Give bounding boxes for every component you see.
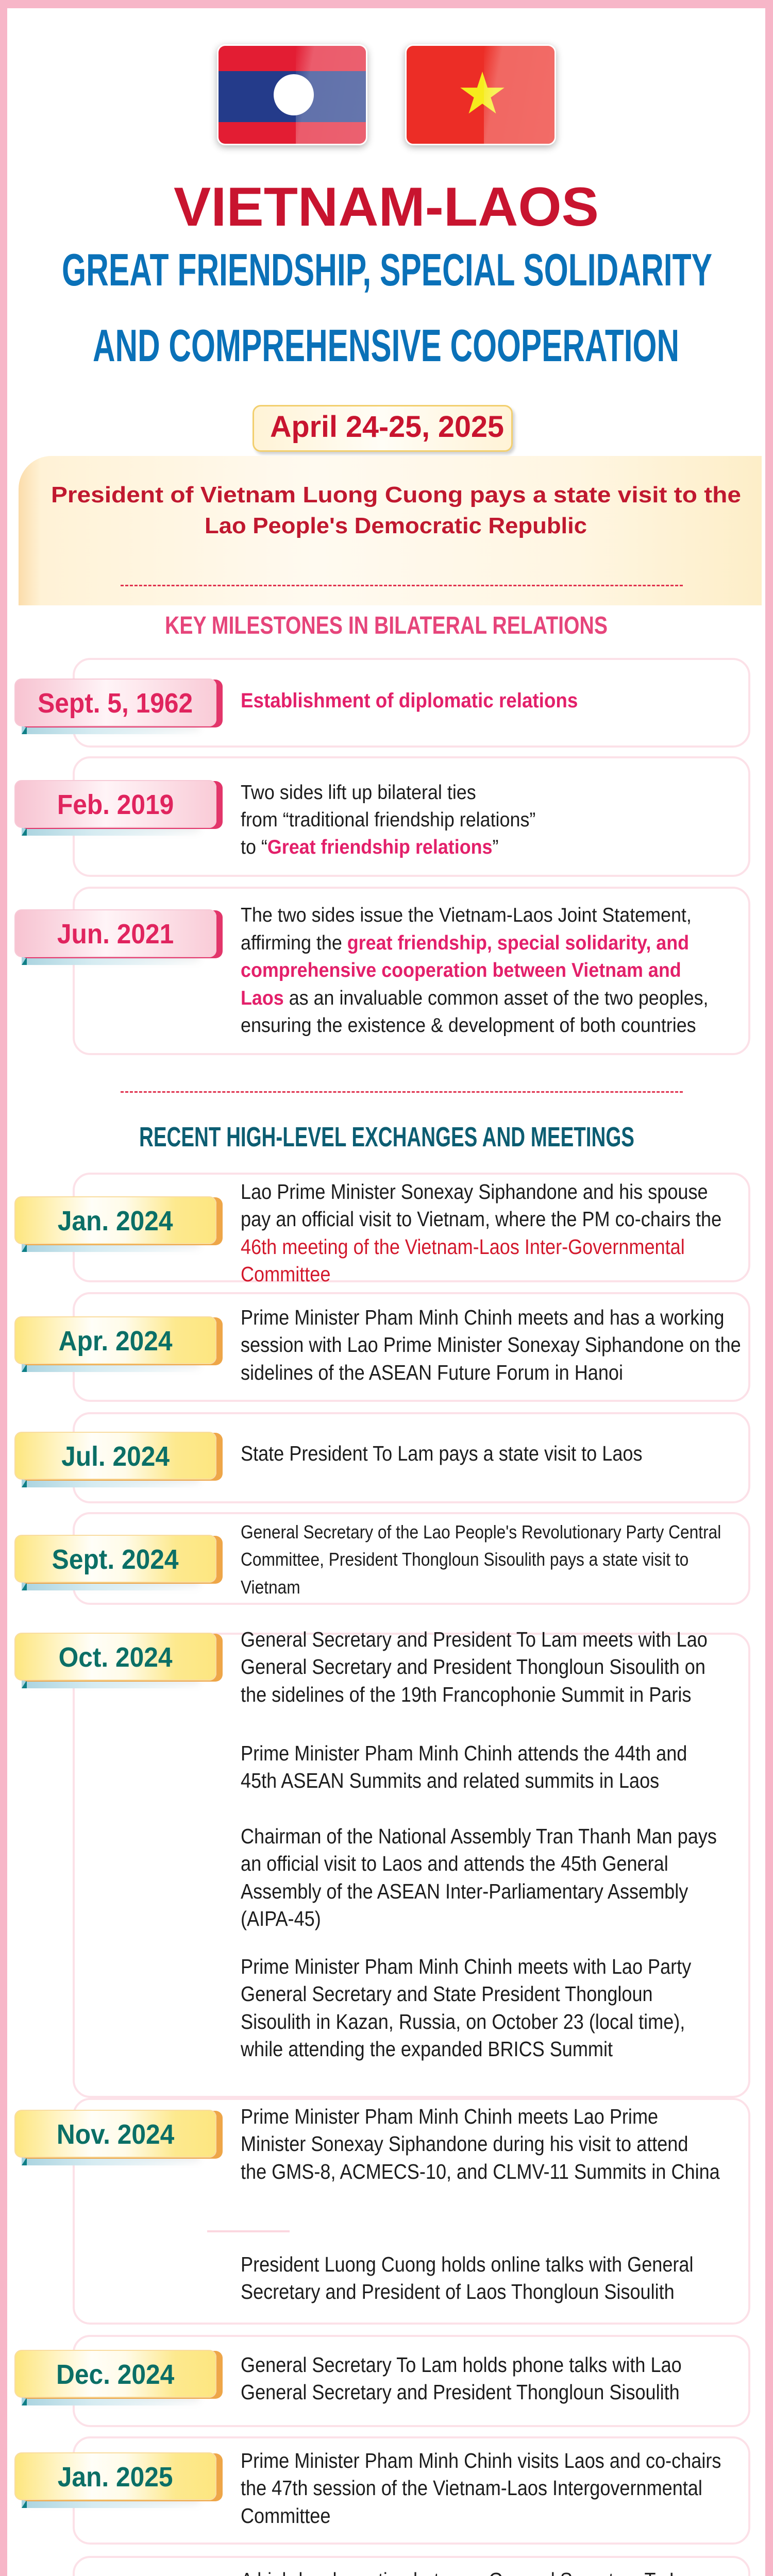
event: Nov 2024: Minister Sonexay Siphandone during his visit to attend	[241, 2132, 688, 2156]
milestone: 2019: from “traditional friendship relations”	[241, 809, 535, 831]
event: Apr 2024: session with Lao Prime Minister Sonexay Siphandone on the	[241, 1333, 741, 1357]
event: Oct 2024: General Secretary and President To Lam meets with Lao	[241, 1628, 708, 1651]
event: Nov 2024: Prime Minister Pham Minh Chinh meets Lao Prime	[241, 2105, 658, 2128]
event: Apr 2024: sidelines of the ASEAN Future Forum in Hanoi	[241, 1361, 623, 1384]
milestone: 2021: comprehensive cooperation between Vietnam and	[241, 959, 681, 981]
event: Nov 2024: the GMS-8, ACMECS-10, and CLMV-11 Summits in China	[241, 2160, 720, 2183]
milestone: 1962: Sept. 5, 1962	[38, 688, 193, 719]
event: Sept 2024	[14, 1512, 750, 1605]
event: Jul 2024: Jul. 2024	[61, 1441, 170, 1472]
event: Apr 2024	[14, 1292, 750, 1402]
event: Dec 2024: General Secretary and President Thongloun Sisoulith	[241, 2380, 680, 2404]
milestone: 2019	[14, 756, 750, 877]
event: Oct 2024: Assembly of the ASEAN Inter-Parliamentary Assembly	[241, 1879, 688, 1903]
milestone: 2019: to “Great friendship relations”	[241, 836, 498, 858]
event: Jan 2025: Jan. 2025	[58, 2462, 173, 2493]
milestone: 2019: Feb. 2019	[57, 789, 174, 820]
panel: visit headline	[19, 456, 762, 605]
flag: Vietnam	[405, 44, 556, 145]
title	[62, 176, 712, 371]
event: Oct 2024: 45th ASEAN Summits and related summits in Laos	[241, 1769, 659, 1792]
event: Oct 2024: Prime Minister Pham Minh Chinh attends the 44th and	[241, 1741, 687, 1765]
event: Oct 2024: General Secretary and State President Thongloun	[241, 1982, 653, 2006]
event: Jan 2024: Committee	[241, 1262, 330, 1286]
event: Jan 2025: Committee	[241, 2504, 330, 2528]
event: Jan 2024: 46th meeting of the Vietnam-Laos Inter-Governmental	[241, 1235, 685, 1259]
event: Sept 2024: Vietnam	[241, 1577, 300, 1598]
event: Sept 2024: General Secretary of the Lao People's Revolutionary Party Central	[241, 1521, 721, 1543]
event: Oct 2024: Chairman of the National Assembly Tran Thanh Man pays	[241, 1824, 717, 1848]
event: Oct 2024: Sisoulith in Kazan, Russia, on October 23 (local time),	[241, 2010, 685, 2033]
event: Apr 2024: Prime Minister Pham Minh Chinh meets and has a working	[241, 1306, 724, 1329]
milestone: 1962: Establishment of diplomatic relations	[241, 689, 578, 712]
event: Oct 2024: Oct. 2024	[59, 1642, 172, 1673]
event: Jan 2024: Jan. 2024	[58, 1206, 173, 1236]
milestone: 1962	[14, 658, 750, 748]
date badge: April 24-25, 2025	[270, 410, 504, 444]
event: Dec 2024: General Secretary To Lam holds phone talks with Lao	[241, 2353, 682, 2377]
event: Dec 2024	[14, 2335, 750, 2427]
event: Oct 2024: the sidelines of the 19th Francophonie Summit in Paris	[241, 1683, 691, 1706]
event: Oct 2024: General Secretary and President Thongloun Sisoulith on	[241, 1655, 705, 1679]
panel: visit headline: President of Vietnam Luong Cuong pays a state visit to the	[51, 482, 741, 507]
event: Jan 2025	[14, 2436, 750, 2545]
event: Apr 2024: Apr. 2024	[59, 1326, 172, 1357]
event: Jul 2024	[14, 1412, 750, 1503]
event: Nov 2024	[14, 2098, 750, 2325]
event: Oct 2024: while attending the expanded BRICS Summit	[241, 2037, 613, 2061]
date badge	[253, 405, 513, 452]
flag: Laos	[217, 44, 367, 145]
event: Jan 2025: the 47th session of the Vietnam-Laos Intergovernmental	[241, 2476, 702, 2500]
event: Nov 2024: Secretary and President of Laos Thongloun Sisoulith	[241, 2280, 675, 2303]
panel: visit headline: Lao People's Democratic Republic	[205, 513, 587, 538]
event: Oct 2024	[14, 1628, 750, 2098]
milestone: 2021: Laos as an invaluable common asset of the two peoples,	[241, 987, 708, 1009]
milestone: 2019: Two sides lift up bilateral ties	[241, 782, 476, 804]
event: Jan 2024: pay an official visit to Vietnam, where the PM co-chairs the	[241, 1207, 721, 1231]
event: Sept 2024: Committee, President Thongloun Sisoulith pays a state visit to	[241, 1549, 688, 1570]
event: Jan 2024: Lao Prime Minister Sonexay Siphandone and his spouse	[241, 1180, 708, 1204]
event: Feb 2025	[73, 2556, 750, 2576]
event: Sept 2024: Sept. 2024	[52, 1544, 179, 1575]
event: Oct 2024: (AIPA-45)	[241, 1907, 321, 1930]
event: Nov 2024: President Luong Cuong holds online talks with General	[241, 2252, 694, 2276]
milestone: 2021: ensuring the existence & development of both countries	[241, 1014, 696, 1037]
event: Oct 2024: Prime Minister Pham Minh Chinh meets with Lao Party	[241, 1955, 691, 1978]
event: Jan 2024	[14, 1173, 750, 1286]
heading: key milestones: KEY MILESTONES IN BILATERAL RELATIONS	[165, 612, 608, 639]
event: Nov 2024: Nov. 2024	[57, 2119, 174, 2150]
milestone: 2021: Jun. 2021	[57, 919, 174, 950]
event: Jul 2024: State President To Lam pays a state visit to Laos	[241, 1442, 643, 1465]
title: VIETNAM-LAOS	[174, 176, 599, 238]
event: Jan 2025: Prime Minister Pham Minh Chinh visits Laos and co-chairs	[241, 2449, 721, 2472]
milestone: 2021: affirming the great friendship, special solidarity, and	[241, 931, 689, 954]
milestone: 2021	[14, 887, 750, 1055]
event: Dec 2024: Dec. 2024	[56, 2359, 175, 2390]
milestone: 2021: The two sides issue the Vietnam-Laos Joint Statement,	[241, 904, 692, 926]
event: Oct 2024: an official visit to Laos and attends the 45th General	[241, 1852, 668, 1875]
